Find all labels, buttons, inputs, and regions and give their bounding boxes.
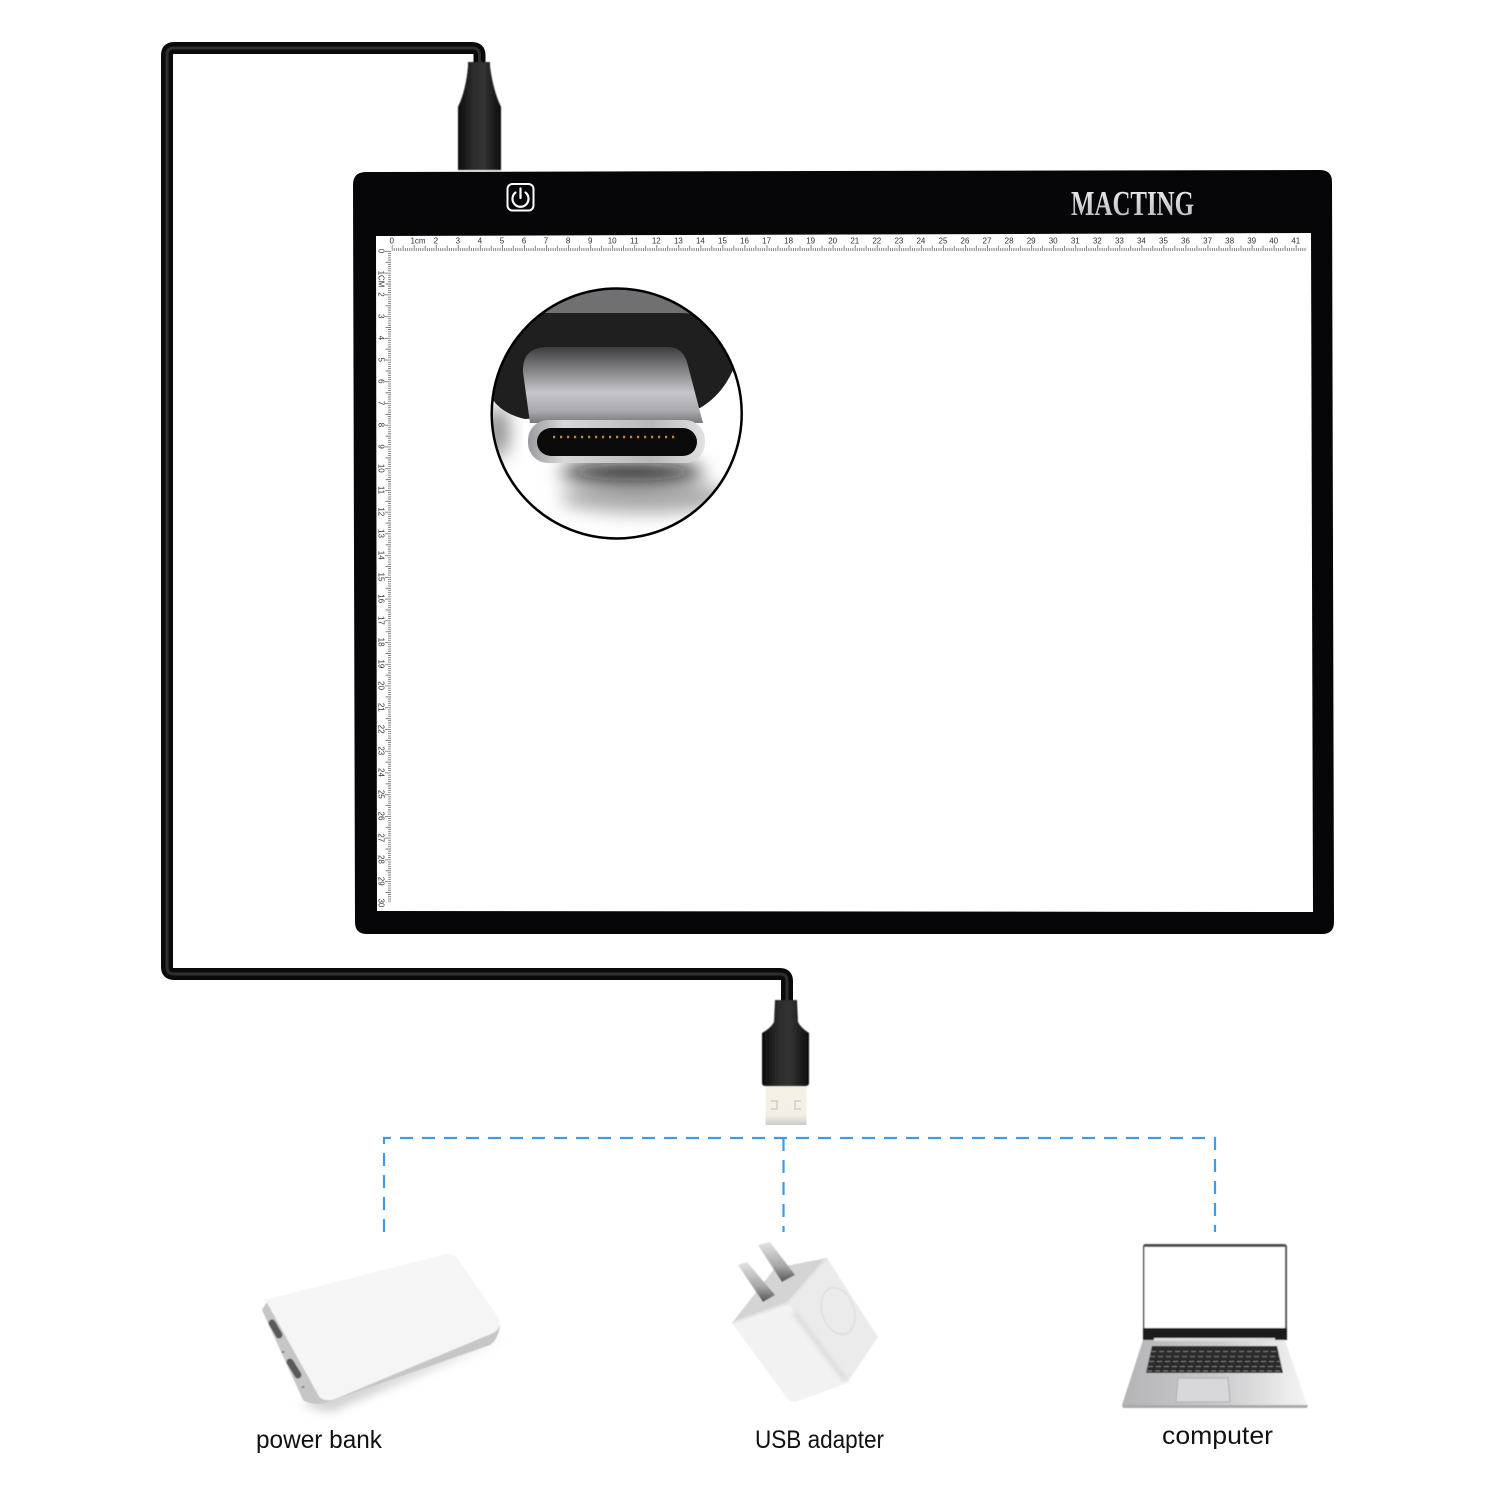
horizontal ruler: 12: [652, 236, 661, 246]
horizontal ruler: 30: [1049, 236, 1058, 246]
vertical ruler: 20: [376, 681, 386, 691]
horizontal ruler: 24: [916, 236, 926, 246]
vertical ruler: 12: [376, 507, 386, 517]
keyboard rows: [1147, 1352, 1282, 1371]
vertical ruler: 3: [376, 314, 386, 319]
horizontal ruler: 18: [784, 236, 794, 246]
power bank indicator dots: [283, 1351, 303, 1388]
vertical ruler: 30: [376, 898, 386, 908]
horizontal ruler: 33: [1115, 236, 1124, 246]
vertical ruler: 11: [376, 486, 386, 495]
plug opening: [537, 428, 697, 456]
laptop front lip: [1122, 1405, 1308, 1408]
label: usb adapter: USB adapter: [755, 1426, 884, 1454]
horizontal ruler: 28: [1005, 236, 1014, 246]
rubber boot: [490, 313, 745, 419]
plug front face: [528, 420, 705, 463]
vertical ruler: 9: [376, 444, 386, 449]
power bank ports: [272, 1323, 298, 1375]
horizontal ruler: 3: [456, 236, 461, 246]
horizontal ruler: 8: [566, 236, 571, 246]
laptop screen: [1144, 1247, 1285, 1328]
adapter prong back: [758, 1242, 795, 1282]
adapter corner shade: [794, 1312, 845, 1380]
adapter edge highlights: [732, 1258, 827, 1323]
power bank top: [266, 1255, 499, 1400]
power touch button: [508, 184, 534, 210]
horizontal ruler: 25: [939, 236, 948, 246]
vertical ruler: 17: [376, 616, 386, 625]
horizontal ruler: 32: [1093, 236, 1102, 246]
label: computer: computer: [1162, 1422, 1273, 1450]
horizontal ruler: 19: [806, 236, 816, 246]
vertical ruler: 18: [376, 638, 386, 647]
vertical ruler: 15: [376, 573, 386, 582]
vertical ruler: 23: [376, 746, 386, 756]
horizontal ruler: 36: [1181, 236, 1190, 246]
adapter right face: [788, 1258, 878, 1383]
vertical ruler: [376, 249, 391, 908]
lens ring: [492, 288, 742, 538]
vertical ruler: 16: [376, 594, 386, 604]
vertical ruler: 8: [376, 423, 386, 428]
power bank shadow: [300, 1338, 505, 1412]
laptop: [1122, 1244, 1308, 1408]
horizontal ruler: 5: [500, 236, 505, 246]
horizontal ruler: 1cm: [410, 236, 426, 246]
vertical ruler: 26: [376, 812, 386, 821]
horizontal ruler: 41: [1291, 236, 1301, 246]
vertical ruler: 22: [376, 725, 386, 734]
horizontal ruler: 40: [1269, 236, 1279, 246]
vertical ruler: 21: [376, 703, 386, 712]
lens background: [490, 285, 745, 543]
plug shadow: [560, 463, 704, 481]
horizontal ruler: 14: [696, 236, 705, 246]
upper grey area: [544, 290, 690, 314]
horizontal ruler: 22: [872, 236, 882, 246]
vertical ruler: 0: [376, 249, 386, 254]
horizontal ruler: 38: [1225, 236, 1235, 246]
vertical ruler: 2: [376, 292, 386, 297]
horizontal ruler: 17: [762, 236, 772, 246]
horizontal ruler: 20: [828, 236, 838, 246]
horizontal ruler: 2: [434, 236, 439, 246]
vertical ruler: 28: [376, 855, 386, 864]
label: power bank: power bank: [256, 1426, 382, 1454]
horizontal ruler: 23: [894, 236, 904, 246]
type-c magnified callout: [485, 285, 745, 543]
adapter left face: [732, 1303, 847, 1402]
horizontal ruler: 11: [630, 236, 639, 246]
vertical ruler: 25: [376, 790, 386, 799]
cable: [167, 48, 787, 1005]
laptop bottom bezel: [1143, 1328, 1287, 1340]
laptop keyboard: [1146, 1346, 1283, 1373]
adapter circle mark: [815, 1283, 861, 1339]
usb adapter: [732, 1242, 878, 1402]
horizontal ruler: 16: [740, 236, 749, 246]
left surface shade: [485, 406, 509, 458]
power bank side: [262, 1300, 500, 1404]
pad frame: [353, 170, 1334, 934]
horizontal ruler: 27: [983, 236, 992, 246]
dashed connector lines: [384, 1138, 1215, 1232]
horizontal ruler: 37: [1203, 236, 1213, 246]
light pad: [353, 170, 1334, 934]
horizontal ruler: [389, 236, 1307, 251]
lit drawing surface: [376, 233, 1313, 912]
horizontal ruler: 26: [961, 236, 970, 246]
vertical ruler: 6: [376, 379, 386, 384]
vertical ruler: 27: [376, 833, 386, 843]
usb housing: [762, 1000, 809, 1086]
vertical ruler: 13: [376, 529, 386, 538]
horizontal ruler: 29: [1027, 236, 1036, 246]
power bank: [262, 1255, 505, 1412]
horizontal ruler: 10: [608, 236, 617, 246]
vertical ruler: 29: [376, 877, 386, 886]
vertical ruler: 10: [376, 464, 386, 473]
horizontal ruler: 21: [850, 236, 860, 246]
vertical ruler: 19: [376, 659, 386, 669]
horizontal ruler: 31: [1071, 236, 1080, 246]
vertical ruler: 24: [376, 768, 386, 777]
lower grey haze: [560, 481, 730, 513]
laptop base: [1122, 1340, 1307, 1405]
adapter top face: [732, 1258, 827, 1323]
horizontal ruler: 9: [588, 236, 593, 246]
usb-a plug: [762, 1000, 809, 1125]
horizontal ruler: 6: [522, 236, 527, 246]
laptop screen bezel: [1143, 1244, 1287, 1340]
horizontal ruler: 0: [389, 236, 394, 246]
vertical ruler: 14: [376, 551, 386, 560]
horizontal ruler: 7: [544, 236, 549, 246]
laptop trackpad: [1176, 1378, 1230, 1402]
type-c connector housing: [458, 62, 501, 170]
horizontal ruler: 4: [478, 236, 483, 246]
horizontal ruler: 13: [674, 236, 683, 246]
horizontal ruler: 15: [718, 236, 727, 246]
brand name: MACTING: [1071, 184, 1194, 223]
contact pins: [553, 436, 679, 438]
laptop hinge: [1154, 1338, 1275, 1341]
vertical ruler: 7: [376, 401, 386, 406]
horizontal ruler: 39: [1247, 236, 1257, 246]
adapter prong front: [738, 1262, 775, 1302]
vertical ruler: 1CM: [376, 271, 386, 288]
vertical ruler: 4: [376, 336, 386, 341]
vertical ruler: 5: [376, 357, 386, 362]
usb metal tip: [766, 1086, 806, 1125]
usb contact windows: [771, 1101, 801, 1109]
horizontal ruler: 34: [1137, 236, 1146, 246]
metal shell: [523, 347, 703, 423]
horizontal ruler: 35: [1159, 236, 1168, 246]
